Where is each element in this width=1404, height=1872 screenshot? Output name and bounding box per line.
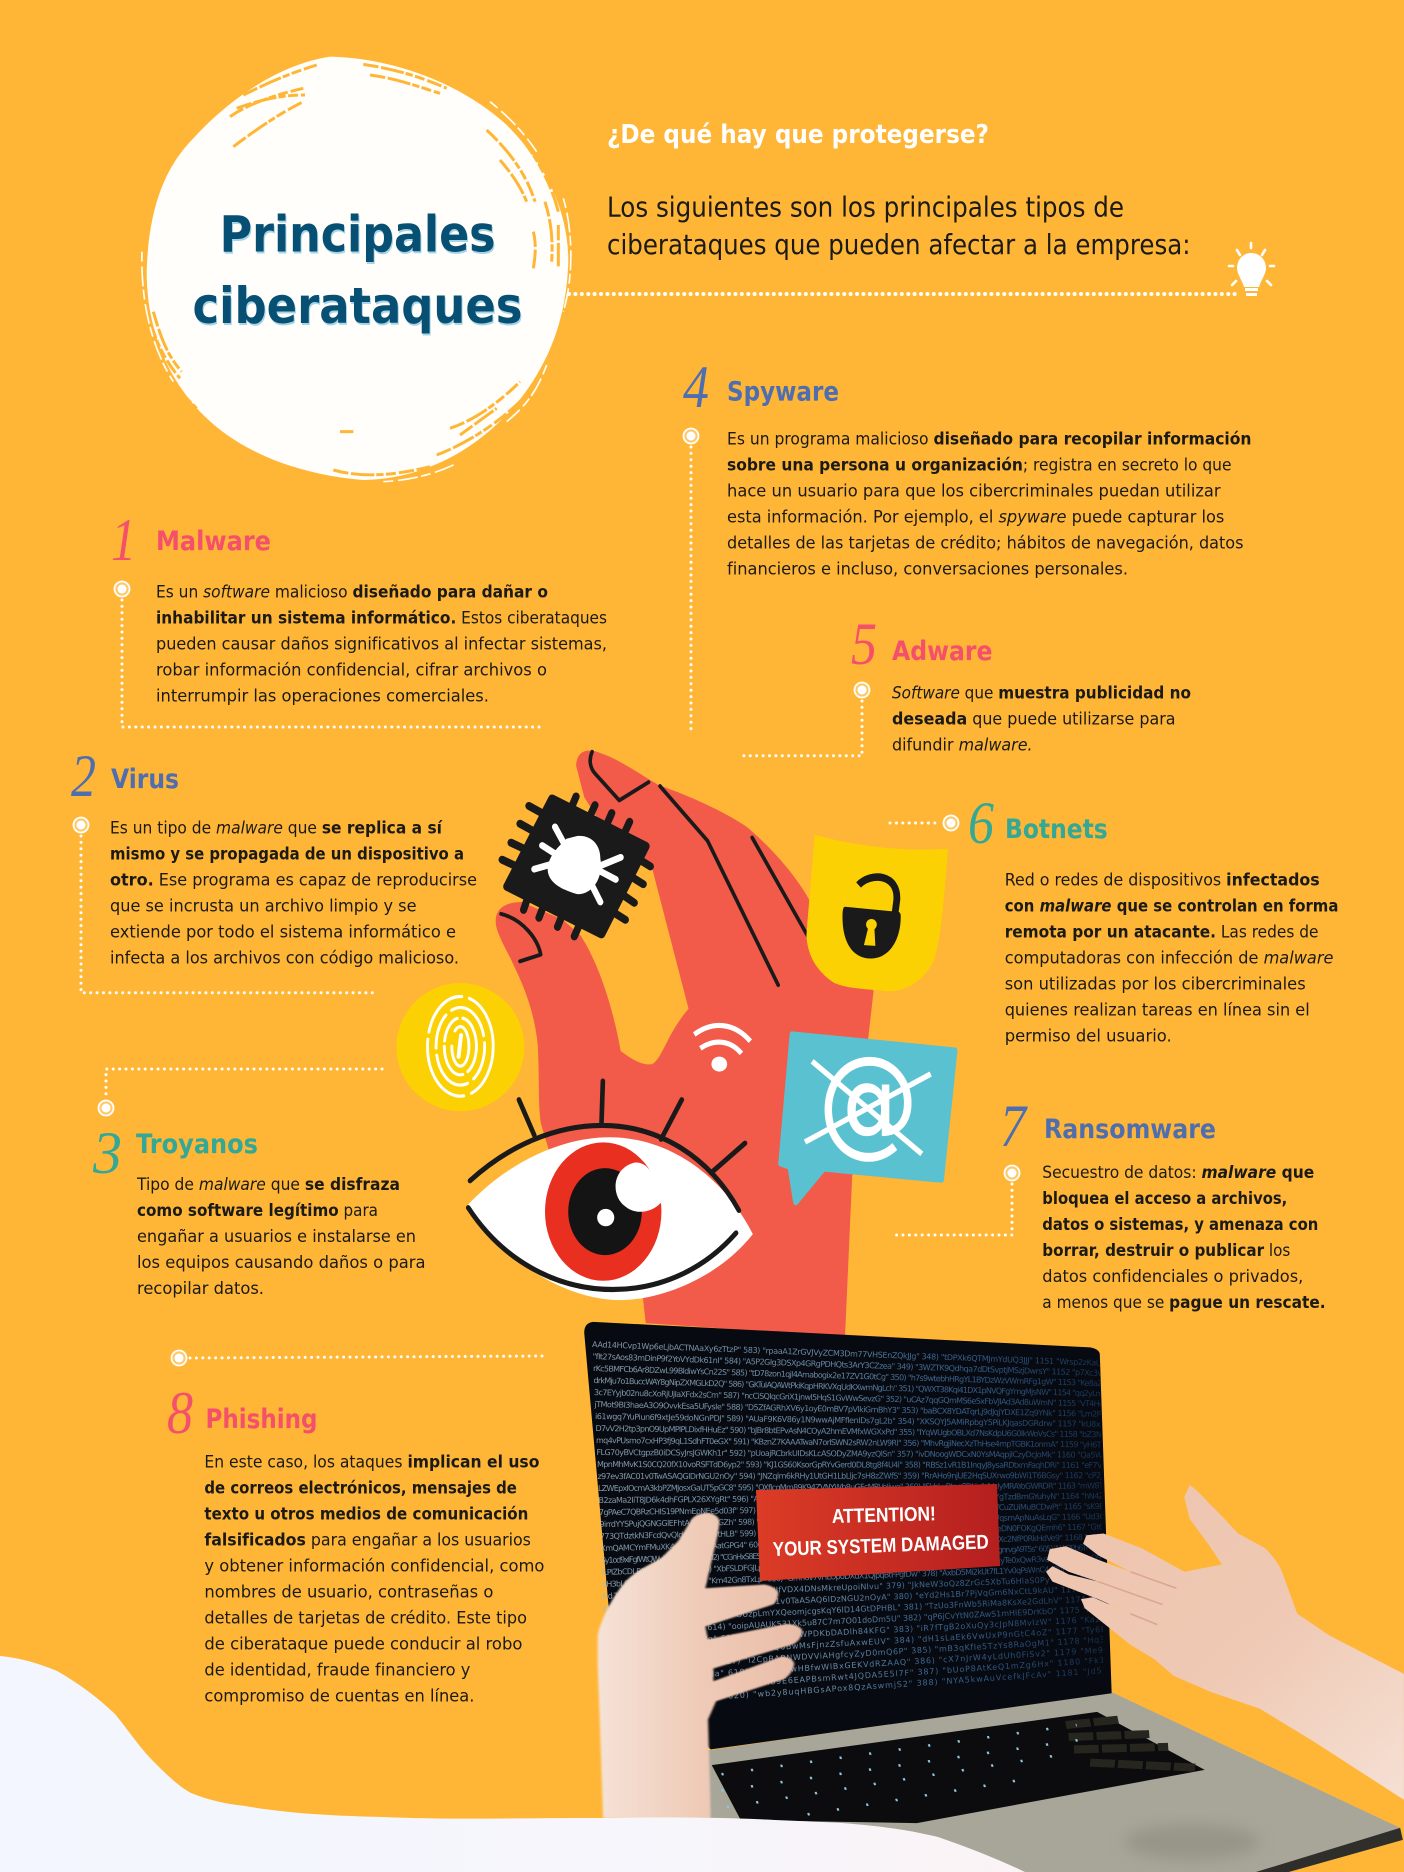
body text: quienes realizan tareas en línea sin el bbox=[1005, 1000, 1310, 1020]
screen code text: B2zaMa2IiT8JD6k4dhFGPLX26XYgRt" 596) "AcbwOlepXy6ozvVDAjV2XKNHyKMSiCtG" 361) "uukgIvzfnIqMuXoDRYgTzdBmGYuhyN" 1164 "hN4Zx bbox=[598, 1492, 1109, 1505]
body text: difundir malware. bbox=[892, 735, 1033, 755]
body text: Secuestro de datos: malware que bbox=[1042, 1163, 1314, 1183]
body text: otro. Ese programa es capaz de reproducirse bbox=[110, 870, 477, 890]
screen code text: XmQAMCYmFMuXK4phVpTjBeRAatGPG4" 600) "iTyBuqHBGsAPox8QzAswmjS2INPG3wV" 601) "S1Qw8YbAmTq7LzXc2NfP0RkHdVe9" 1168 "oR2Kv bbox=[600, 1532, 1111, 1553]
heading: Malware: Malware bbox=[156, 526, 271, 557]
body text: de correos electrónicos, mensajes de bbox=[204, 1479, 517, 1499]
icon: crossed-out email bubble bbox=[781, 1031, 955, 1203]
body text: a menos que se pague un rescate. bbox=[1042, 1293, 1326, 1313]
body text: nombres de usuario, contraseñas o bbox=[204, 1583, 493, 1603]
subheading: ¿De qué hay que protegerse? bbox=[607, 120, 989, 150]
body text: de ciberataque puede conducir al robo bbox=[204, 1635, 522, 1655]
pin bbox=[684, 428, 698, 444]
section 1: Malware bbox=[111, 507, 607, 727]
connector bbox=[892, 1184, 1012, 1235]
body text: son utilizadas por los cibercriminales bbox=[1005, 974, 1306, 994]
icon: eye bbox=[468, 1081, 753, 1300]
warning banner bbox=[756, 1484, 1000, 1581]
screen code text: yN7eDkC2sTqG5xMfR4Ow" 619) "ho9E6EAPBsmRwt4JQDA5E5I7F" 387) "bUoP8AtKeQ1mZg6Hx" 1180 "Fk1Ys bbox=[606, 1655, 1116, 1697]
body text: Es un programa malicioso diseñado para recopilar información bbox=[727, 429, 1252, 449]
body text: de identidad, fraude financiero y bbox=[204, 1661, 470, 1681]
warning banner: YOUR SYSTEM DAMAGED bbox=[772, 1531, 989, 1561]
screen code text: rKc5BMFCb6Ar8DZwL99BldiwYsCn22S" 585) "tD78zon1qjI4Amabogix2e17ZV1G0tCg" 350) "h7s9wtebhHRgYL1BYDzWzVWmRFg1gW" 1153 "Ke8aZ bbox=[593, 1364, 1103, 1388]
screen code text: LZWEpxIOcmA3kbPZMJosxGaUT5pGC8" 595) "OXfJcqMm89K94ZVNYWb8uGFcMBVoIiwg" 360) "SkbLxBtacCDLjs4dVulyMRAYoGWRDR" 1163 "mW8Tg bbox=[598, 1481, 1108, 1493]
heading: Botnets: Botnets bbox=[1005, 814, 1108, 845]
icon: wifi bbox=[694, 1025, 750, 1072]
screen code text: Sy1od9xIFgfWtQWyjLZAeX3J2sG" 602) "CGnHxS8ES3Qw84CE8gRqMpenj" 603) "K8gblB7KabQGgjUNAyFqrQ" 604) "EfmgVGDaKfygnrvgA9T5s" 605) "kW3Pb6Tn" 1169 bbox=[601, 1543, 1111, 1565]
body text: Es un tipo de malware que se replica a sí bbox=[110, 818, 443, 838]
section 5: Adware bbox=[740, 611, 1191, 756]
screen code text: mq4vPUsmo7cxHP3fj9qL1SdhFT0eGX" 591) "KBznZ7KAAATwaN7orlSWN2sRW2nLW9Rl" 356) "MhvRgjiNecXzThHse4mpTGBK1onmA" 1159 "yH6Tq bbox=[596, 1436, 1106, 1449]
icon: lightbulb bbox=[1229, 243, 1274, 296]
laptop bbox=[584, 1322, 1403, 1872]
connector bbox=[81, 836, 377, 993]
pin bbox=[98, 1100, 114, 1116]
connector bbox=[890, 822, 941, 824]
screen code text: D7vV2H2tp3pnO9UpMPlPLDixfHHuEz" 590) "bJBr8btEPvAsN4COyA2hmEVMfxWGXxPd" 355) "IYqWUgbOBLXd7NsKdpU6G0IkWoVsCs" 1158 "bZ3Nc bbox=[595, 1424, 1106, 1439]
body text bbox=[156, 582, 607, 706]
heading: Ransomware: Ransomware bbox=[1044, 1114, 1216, 1145]
screen code text: 773QTdztkN3FcdQvQIdplGs7YPwtHLB" 599) "alfHLWDMTTXzxqnCbwVQtXVMlzjpAdX" 364) "JIP0LWE7wVkZPUD9eDN0FOKgQEmh6" 1167 "Gt6Yl bbox=[600, 1522, 1110, 1541]
body text: sobre una persona u organización; registra en secreto lo que bbox=[727, 455, 1232, 475]
screen code text: aH1iVuJ8wBnS6zFcL3Kp" 620) "wb2y8uqHBGsAPox8QzAswmjS2" 388) "NYA5kwAuVcefkJFcAv" 1181 "Jd5Wo bbox=[607, 1665, 1116, 1709]
screen code text: Kd7LqP2sFVn9B4TgYxA1" 611) "mgDdNHJfVDX4DNsMkreUpoiNIvu" 379) "JkNeW3oQz8ZrGc5XbTu6HlaS0Py" 1172 "Wy5Ln bbox=[602, 1573, 1112, 1601]
body text: como software legítimo para bbox=[137, 1201, 378, 1221]
body text: texto u otros medios de comunicación bbox=[204, 1505, 528, 1525]
number 2: 2 bbox=[71, 743, 96, 809]
body text: infecta a los archivos con código malicioso. bbox=[110, 948, 459, 968]
connector bbox=[740, 701, 862, 756]
screen code text: zD5oBfU3RyNcW7IeXk2i" 614) "ooipAUAUK531Xk5u87C7m7O01doDm5U" 382) "qP6jCvYtN0ZAwS1mHlE9DrKbO" 1175 "Nb7Gu bbox=[604, 1604, 1114, 1637]
pin bbox=[854, 682, 870, 698]
body text bbox=[1042, 1163, 1326, 1313]
heading: Virus: Virus bbox=[111, 764, 179, 795]
body text: financieros e incluso, conversaciones personales. bbox=[727, 559, 1128, 579]
number 8: 8 bbox=[167, 1380, 193, 1446]
number 6: 6 bbox=[968, 790, 994, 856]
screen code text bbox=[592, 1340, 1116, 1709]
body text: interrumpir las operaciones comerciales. bbox=[156, 686, 489, 706]
screen code text: i61wgq7YuPiun6f9xtJe59doNGnPDJ" 589) "AUaF9K6V86y1N9wwAjMFflenIDs7gL2b" 354) "XKSQYJ5AMiRpbgY5PiLKJqasDGRdrw" 1157 "kU8xP bbox=[595, 1412, 1105, 1429]
icon: padlock on yellow shield bbox=[806, 835, 948, 991]
screen code text: z97ev3fAC01v0TwASAQGIDrNGU2nOy" 594) "JNZqlm6kRHy1UtGH1LbLljc7sH8zZWfS" 359) "RrAHo9njUE2HqSUXrwo9bWi1T6BGsy" 1162 "cP2Ju bbox=[597, 1471, 1108, 1481]
screen code text: hS8nKv1YtGqM4LdJ6wPa" 613) "OUzpLmYXQeomjcgsKqY6lD14GtDPHBL" 381) "TzUo3FnWb5RiMa8KsXe2GdLhV" 1174 "Xr4Js bbox=[603, 1594, 1113, 1625]
section 6: Botnets bbox=[890, 790, 1338, 1046]
warning banner: ATTENTION! bbox=[832, 1503, 936, 1528]
pin bbox=[114, 582, 130, 596]
connector bbox=[690, 447, 692, 733]
pin bbox=[1004, 1166, 1020, 1180]
laptop base bbox=[695, 1692, 1403, 1872]
section 3: Troyanos bbox=[92, 1069, 426, 1299]
keyboard bbox=[712, 1712, 1205, 1823]
screen code text: 7gPAeC7QBRzCHIS19PNmEpNEe5d03f" 597) "noSXpmwc3mXWWPoVs3zTrqjdZ8dD8ehB" 362) "sUebExrhzFzgeRTfCuZUiMuBCDwPt" 1165 "sK9Bo bbox=[599, 1502, 1109, 1517]
body text: esta información. Por ejemplo, el spyware puede capturar los bbox=[727, 507, 1224, 527]
body text bbox=[110, 818, 477, 968]
intro text bbox=[607, 191, 1190, 261]
number 5: 5 bbox=[851, 611, 877, 677]
pin bbox=[74, 818, 88, 832]
body text: computadoras con infección de malware bbox=[1005, 948, 1333, 968]
body text bbox=[136, 1175, 426, 1299]
body text: remota por un atacante. Las redes de bbox=[1005, 922, 1318, 942]
body text: engañar a usuarios e instalarse en bbox=[137, 1227, 416, 1247]
screen bbox=[584, 1322, 1112, 1749]
screen code text: FLG70yBVCtgpzB0iDCSyJrsJGWKh1r" 592) "pUoajRCbrkUIDsKLcASODyZMA9yzQISn" 357) "ivDNoogWDCxN0YsMAqpjICzyDcJoMk" 1160 "Qa5Ws bbox=[596, 1448, 1107, 1460]
body text bbox=[892, 683, 1191, 755]
body text bbox=[1005, 870, 1338, 1046]
icon: virus chip bbox=[502, 796, 650, 936]
body text: deseada que puede utilizarse para bbox=[892, 709, 1176, 729]
white wave bottom bbox=[0, 1656, 1025, 1872]
screen code text: wM9tGaHxC6PjLs1Ek4Vq" 615) "ewTeHPAGUWPDKbDADlh84KFG" 383) "iR7fTgB2oXuQy3cJpN8MvIzW" 1176 "Ka2Pm bbox=[604, 1614, 1114, 1649]
body text bbox=[204, 1453, 544, 1707]
screen code text: tL3gZmQ9oEuI1bPvK8Ha" 618) "dDt5xXwHBfwWIBxGEKVdRZAAQ" 386) "cX7nJrW4yLdUh0FiSv2" 1179 "Me9Ab bbox=[606, 1645, 1115, 1685]
body text: datos o sistemas, y amenaza con bbox=[1042, 1215, 1318, 1235]
heading: Adware: Adware bbox=[892, 636, 992, 667]
body text: los equipos causando daños o para bbox=[137, 1253, 426, 1273]
screen code text: AAd14HCvp1Wp6eLjbACTNAaXy6zTtzP" 583) "rpaaA1ZrGVJVyZCM3Dm77VHSEnZQkJJg" 348) "tDPXk6QTMJmYdUQ3JJJ" 1151 "Wrsp2zKaU bbox=[592, 1340, 1102, 1368]
photo: hands bbox=[598, 1485, 1404, 1818]
screen code text: nF2uRdYz8KbOiT5QeGm3" 616) "ml1Q6BwMsFjnzZsfuAxwEUV" 384) "dH1sLaEk6VwUxP9nGtC4oZ" 1177 "Ty6Dw bbox=[605, 1624, 1115, 1661]
screen code text: "fIt27sAos83mDinP9f2YoVYdDk61nI" 584) "A5P2GIg3DSXp4GRgPDHQts3ArY3CZzea" 349) "3WZTK9Qdhqa7dDtSvptjMSzjDwrsY" 1152 "p7Xc3v bbox=[592, 1352, 1103, 1378]
body text bbox=[727, 429, 1252, 579]
intro text: ciberataques que pueden afectar a la empresa: bbox=[607, 228, 1190, 261]
illustration: hand with cyber icons bbox=[396, 751, 955, 1337]
connector bbox=[106, 1069, 382, 1098]
section 8: Phishing bbox=[167, 1350, 545, 1707]
title brush circle bbox=[142, 57, 571, 482]
body text: compromiso de cuentas en línea. bbox=[204, 1687, 474, 1707]
section 4: Spyware bbox=[683, 354, 1252, 733]
screen code text: 3c7EYyjb02nu8cXoRjUjIaXFdx2sCm" 587) "ncCiSQlqcGriX1jnwl5HqS1GvWwSevzG" 352) "uCAz7qqGQmMS6eSxFbVJlAd3Ad8uWmN" 1155 "vT4Ho bbox=[594, 1388, 1104, 1409]
screen code text: 9irrdYYSPujQGNGGlEFhtAAbPDadGZh" 598) "sw2eSeTi3UPGQ6vw9cuIiQHJPMyjj9Yn" 363) "ED01AMYyasvJPZ2ZWqsmApNuAsLqG" 1166 "Ud3Ce bbox=[599, 1512, 1110, 1529]
connector bbox=[122, 600, 544, 727]
title: ciberataques bbox=[192, 277, 522, 335]
title: Principales bbox=[220, 206, 496, 264]
body text: detalles de tarjetas de crédito. Este tipo bbox=[204, 1609, 527, 1629]
body text: mismo y se propagada de un dispositivo a bbox=[110, 844, 464, 864]
hand bbox=[496, 751, 874, 1337]
body text: Tipo de malware que se disfraza bbox=[136, 1175, 400, 1195]
finger lines bbox=[501, 752, 807, 985]
body text: datos confidenciales o privados, bbox=[1042, 1267, 1303, 1287]
connector bbox=[190, 1356, 545, 1358]
screen code text: jTMot9BI3haeA3O9OvvkEsa5UFysIe" 588) "D5ZfAGRhXV6y1oyE0mBV7pVlkiGmBhY3" 353) "baBCX8YDATqrLj9dJqjYDXE1Zq9YNk" 1156 "Lm2Rf bbox=[593, 1400, 1105, 1419]
body text: bloquea el acceso a archivos, bbox=[1042, 1189, 1287, 1209]
base front edge bbox=[1256, 1828, 1403, 1872]
number 1: 1 bbox=[111, 507, 136, 573]
section 2: Virus bbox=[71, 743, 477, 993]
header dotted connector bbox=[569, 292, 1236, 296]
icon: fingerprint bbox=[396, 983, 524, 1111]
body text: hace un usuario para que los cibercriminales puedan utilizar bbox=[727, 481, 1221, 501]
screen code text: iLPIZbCDLPAnuRVkSc7NJ5" 606) "XbFSLDFGJLpEdzs" 607) "hrvSZTmpUQ4Hmq2" 608) "m6IUHqKsPoDc" 377) "tGMnyTe0xQwR3vaLJ7" 1170 "pQ9Ha bbox=[601, 1553, 1111, 1577]
screen code text: pQ2cXbT7ZeRm9Uo3KfWh" 612) "v3fAC01v0TaASAQ6IDzNGU2nOyA" 380) "eYd2Hs1Br7PjVqGm6NxCtL9kAU" 1173 "Zc8Qi bbox=[603, 1584, 1113, 1613]
screen code text: dH3bL9sQmVe7P0HDC0" 609) "Km42Gn8TxLp" 610) "Gmn6v7vHLOpoDXdX1QjpqBtFPgfDw" 378) "AxbD5Mi2kUt7fL1Yv0qPsWnC4eRhJ" 1171 "Vt1Mf bbox=[602, 1563, 1112, 1589]
pin bbox=[172, 1350, 186, 1366]
right hand bbox=[1046, 1485, 1404, 1800]
body text: permiso del usuario. bbox=[1005, 1026, 1172, 1046]
number 7: 7 bbox=[1000, 1093, 1029, 1159]
body text: que se incrusta un archivo limpio y se bbox=[110, 896, 416, 916]
body text: detalles de las tarjetas de crédito; hábitos de navegación, datos bbox=[727, 533, 1244, 553]
body text: inhabilitar un sistema informático. Estos ciberataques bbox=[156, 608, 607, 628]
number 3: 3 bbox=[92, 1120, 122, 1186]
intro text: Los siguientes son los principales tipos de bbox=[607, 191, 1124, 224]
body text: con malware que se controlan en forma bbox=[1005, 896, 1338, 916]
body text: borrar, destruir o publicar los bbox=[1042, 1241, 1290, 1261]
section 7: Ransomware bbox=[892, 1093, 1326, 1313]
body text: robar información confidencial, cifrar archivos o bbox=[156, 660, 547, 680]
body text: pueden causar daños significativos al infectar sistemas, bbox=[156, 634, 607, 654]
body text: Software que muestra publicidad no bbox=[892, 683, 1191, 703]
pin bbox=[944, 816, 958, 830]
heading: Spyware: Spyware bbox=[727, 377, 839, 408]
body text: Es un software malicioso diseñado para dañar o bbox=[156, 582, 548, 602]
trackpad shadow bbox=[1124, 1824, 1260, 1860]
body text: extiende por todo el sistema informático e bbox=[110, 922, 456, 942]
screen code text: jV6cSpA0XhW4NrJl7DyU" 617) "i2CpBABNWDVViAHgfcyZyD0mQ6P" 385) "mB3qKfIe5TzYs8RaOgM1" 1178 "Hq3Xr bbox=[604, 1635, 1115, 1673]
number 4: 4 bbox=[683, 354, 709, 420]
body text: recopilar datos. bbox=[137, 1279, 264, 1299]
left hand bbox=[598, 1513, 802, 1818]
screen code text: MpnMhMvK1S0CQ20fX10voRSFTdD6yp2" 593) "KJ1GS60KsorGpRYvGerd0DL8tg8f4U4l" 358) "RBSz1vR1B1InqyJ8ysaRDtxmFaqhDRi" 1161 "eF7Vd bbox=[597, 1460, 1107, 1470]
body text: Red o redes de dispositivos infectados bbox=[1005, 870, 1320, 890]
body text: En este caso, los ataques implican el uso bbox=[204, 1453, 540, 1473]
title bbox=[192, 206, 522, 335]
heading: Troyanos: Troyanos bbox=[136, 1129, 258, 1160]
screen code text: drkMju7o1BuccWAY8gNipZXMGLkD2Q" 586) "GKTuIAQAWtPkiKqpHRKVXqUdKXwmNgLch" 351) "QWXT38Kqi41DX1pNVQFgYmgMjsNW" 1154 "qq2yLm bbox=[593, 1376, 1104, 1398]
icon: crossed-out email bubble: @ bbox=[818, 1031, 918, 1170]
body text: falsificados para engañar a los usuarios bbox=[204, 1531, 531, 1551]
body text: y obtener información confidencial, como bbox=[204, 1557, 544, 1577]
heading: Phishing: Phishing bbox=[206, 1404, 318, 1435]
